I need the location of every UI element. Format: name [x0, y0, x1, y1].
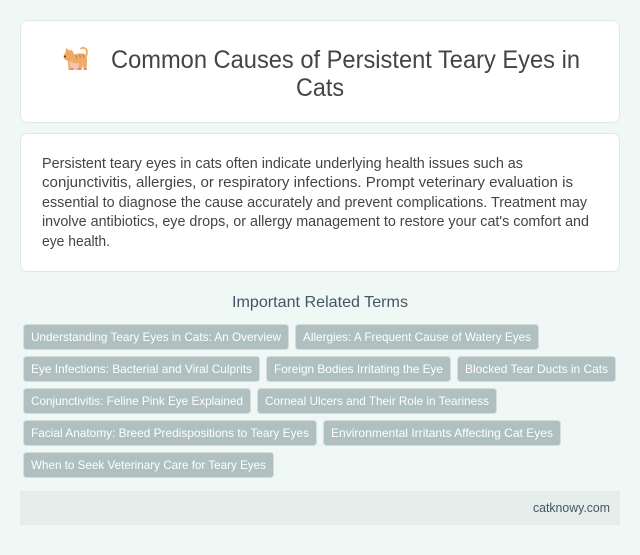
tag — [24, 324, 288, 350]
title: Common Causes of Persistent Teary Eyes in — [111, 46, 580, 74]
text block: description: eye health. — [42, 233, 110, 250]
tag — [324, 420, 560, 446]
footer text: catknowy.com — [533, 500, 610, 515]
tags: related terms — [24, 324, 616, 478]
tag — [266, 356, 450, 382]
tag — [458, 356, 616, 382]
tag: Environmental Irritants Affecting Cat Eyes — [331, 426, 553, 440]
tag: Allergies: A Frequent Cause of Watery Eyes — [303, 330, 531, 344]
tag — [24, 420, 316, 446]
footer bar — [20, 491, 620, 525]
tag — [24, 356, 260, 382]
tag: Facial Anatomy: Breed Predispositions to Teary Eyes — [31, 426, 309, 440]
icon: cat — [63, 48, 87, 70]
tag: Blocked Tear Ducts in Cats — [465, 362, 608, 376]
heading: important related terms: Important Related Terms — [232, 294, 408, 311]
title: Cats — [296, 74, 344, 102]
tag: Eye Infections: Bacterial and Viral Culprits — [31, 362, 252, 376]
tag: Conjunctivitis: Feline Pink Eye Explained — [31, 394, 243, 408]
panel: description card — [20, 134, 620, 272]
text block: description — [42, 155, 589, 250]
panel: title card — [20, 20, 620, 122]
text block: description: essential to diagnose the cause accurately and prevent complications. Treatment may — [42, 194, 587, 211]
title — [111, 46, 580, 102]
tag — [296, 324, 538, 350]
tag — [24, 452, 274, 478]
text block: description: Persistent teary eyes in cats often indicate underlying health issues such as — [42, 155, 523, 172]
tag — [24, 388, 250, 414]
tag: Foreign Bodies Irritating the Eye — [274, 362, 443, 376]
tag: When to Seek Veterinary Care for Teary Eyes — [31, 458, 266, 472]
tag — [258, 388, 496, 414]
text block: description: conjunctivitis, allergies, or respiratory infections. Prompt veterinary evaluation is — [42, 174, 573, 191]
tag: Understanding Teary Eyes in Cats: An Overview — [31, 330, 281, 344]
tag: Corneal Ulcers and Their Role in Teariness — [265, 394, 489, 408]
text block: description: involve antibiotics, eye drops, or allergy management to restore your cat's comfort and — [42, 213, 589, 230]
